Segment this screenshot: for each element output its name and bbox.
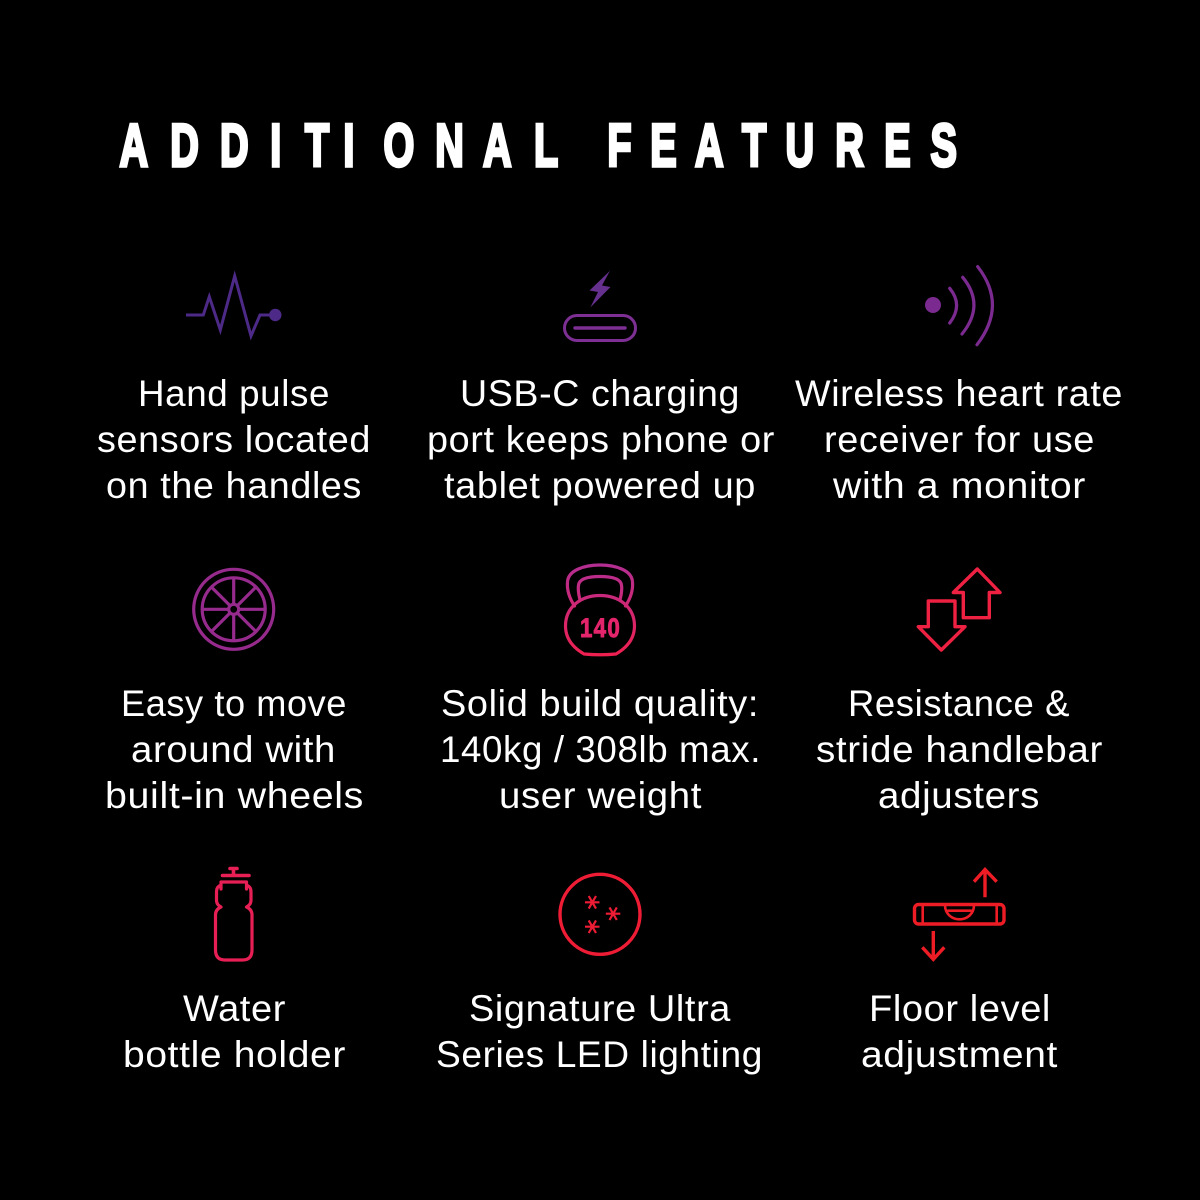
text: built-in wheels: built-in wheels xyxy=(105,775,364,816)
icon: wireless signal xyxy=(925,267,992,345)
panel: water bottle xyxy=(123,868,346,1075)
text: build quality: 140kg / 308lb max. xyxy=(440,729,761,770)
text: wireless heart rate: receiver for use xyxy=(824,419,1095,460)
icon: spirit level with arrows xyxy=(914,870,1004,959)
icon: 140 kettlebell xyxy=(566,565,634,655)
icon: bottle xyxy=(216,868,252,960)
text: build quality: user weight xyxy=(499,775,702,816)
panel: LED lighting xyxy=(436,874,763,1075)
text: wireless heart rate: with a monitor xyxy=(832,465,1086,506)
text: floor level: Floor level xyxy=(869,988,1051,1029)
title: ADDITIONAL FEATURES xyxy=(120,112,957,179)
text: floor level xyxy=(861,988,1058,1075)
text: water bottle xyxy=(123,988,346,1075)
panel: built-in wheels xyxy=(105,569,364,816)
icon: USB-C port with bolt xyxy=(564,271,636,340)
icon: pulse line xyxy=(186,276,281,336)
text: USB-C charging: USB-C charging xyxy=(460,373,740,414)
icon: 140 kettlebell: 140 xyxy=(580,613,621,643)
text: adjusters: adjusters xyxy=(878,775,1040,816)
text: hand pulse sensors: sensors located xyxy=(97,419,371,460)
panel: floor level xyxy=(861,870,1058,1075)
text: built-in wheels: Easy to move xyxy=(121,683,347,724)
text: adjusters xyxy=(816,683,1103,816)
text: build quality: Solid build quality: xyxy=(441,683,759,724)
text: built-in wheels: around with xyxy=(131,729,336,770)
text: hand pulse sensors: on the handles xyxy=(106,465,362,506)
text: water bottle: bottle holder xyxy=(123,1034,346,1075)
text: LED lighting: Series LED lighting xyxy=(436,1034,763,1075)
text: LED lighting: Signature Ultra xyxy=(469,988,731,1029)
icon: LED circle xyxy=(560,874,640,954)
text: USB-C charging: tablet powered up xyxy=(444,465,756,506)
text: USB-C charging xyxy=(427,373,775,506)
panel: wireless heart rate xyxy=(795,267,1123,506)
text: build quality xyxy=(440,683,761,816)
icon: wheel xyxy=(194,569,274,649)
text: adjusters: Resistance & xyxy=(848,683,1070,724)
text: adjusters: stride handlebar xyxy=(816,729,1103,770)
panel: USB-C charging xyxy=(427,271,775,506)
text: floor level: adjustment xyxy=(861,1034,1058,1075)
text: water bottle: Water xyxy=(183,988,286,1029)
text: wireless heart rate: Wireless heart rate xyxy=(795,373,1123,414)
text: LED lighting xyxy=(436,988,763,1075)
panel: build quality xyxy=(440,565,761,816)
panel: adjusters xyxy=(816,569,1103,816)
text: wireless heart rate xyxy=(795,373,1123,506)
icon: up and down arrows xyxy=(918,569,1000,650)
text: hand pulse sensors: Hand pulse xyxy=(138,373,330,414)
panel: hand pulse sensors xyxy=(97,276,371,506)
text: hand pulse sensors xyxy=(97,373,371,506)
text: USB-C charging: port keeps phone or xyxy=(427,419,775,460)
text: built-in wheels xyxy=(105,683,364,816)
